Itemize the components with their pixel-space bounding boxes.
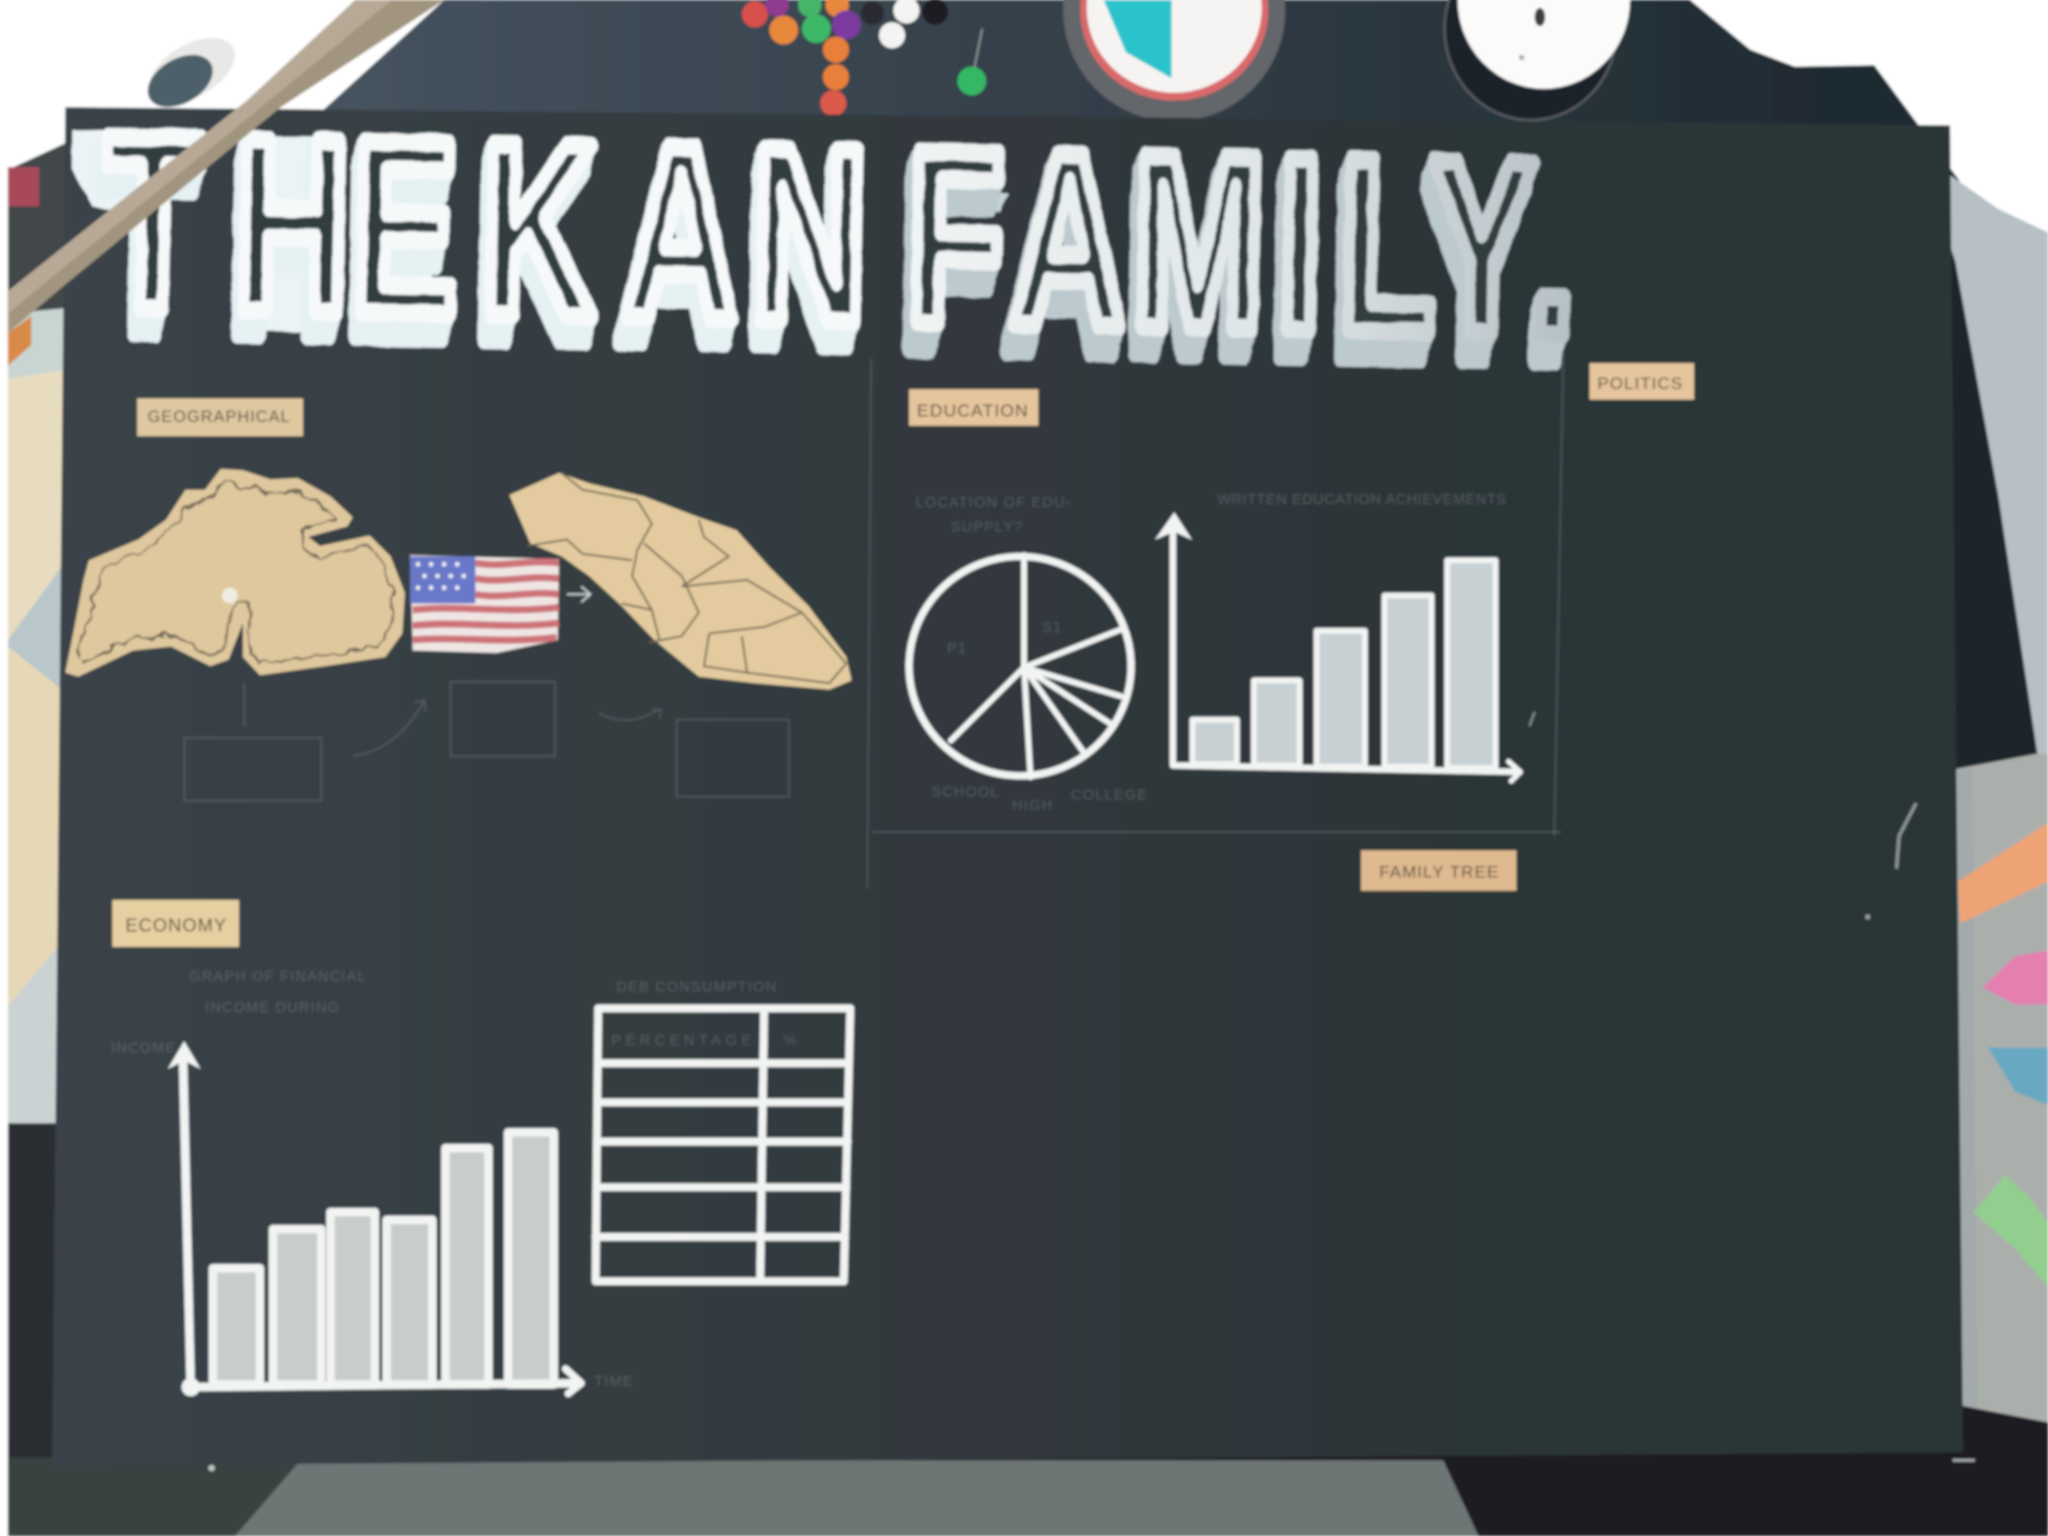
faint pie labels: SCHOOL bbox=[931, 785, 1000, 801]
bar chart: economy bbox=[111, 1041, 634, 1396]
table: PERCENTAGE bbox=[611, 1033, 752, 1049]
bar chart: education bbox=[1159, 515, 1520, 781]
label: geographical bbox=[137, 398, 303, 436]
faint pencil flow diagram bbox=[184, 682, 789, 801]
faint pie labels: COLLEGE bbox=[1071, 787, 1148, 803]
arrow: flag to map bbox=[567, 586, 590, 602]
panel: economy bbox=[111, 900, 850, 1396]
title word: FAMILY: FAMILY. bbox=[904, 98, 1579, 388]
mouse object bbox=[138, 24, 246, 118]
label: education bbox=[909, 389, 1038, 426]
color sticky notes bbox=[1958, 823, 2048, 1287]
faint bar chart heading: WRITTEN EDUCATION ACHIEVEMENTS bbox=[1217, 492, 1507, 508]
faint table heading: DEB CONSUMPTION bbox=[616, 979, 777, 995]
chalk specks and scratches bbox=[208, 55, 1975, 1471]
label: education: EDUCATION bbox=[917, 401, 1029, 421]
faint pencil dividers bbox=[867, 350, 1563, 888]
bar chart: economy: INCOME bbox=[111, 1041, 176, 1057]
label: economy bbox=[112, 900, 239, 947]
label: politics bbox=[1590, 363, 1694, 400]
title: The Kan Family bbox=[72, 84, 1579, 388]
map pins bbox=[742, 0, 986, 116]
candle bbox=[1445, 0, 1630, 120]
label: economy: ECONOMY bbox=[125, 914, 227, 935]
panel: education bbox=[909, 389, 1520, 814]
faint economy chart heading: GRAPH OF FINANCIAL bbox=[189, 969, 367, 985]
label: politics: POLITICS bbox=[1597, 374, 1683, 393]
label: family tree bbox=[1361, 850, 1516, 891]
title letters bbox=[102, 84, 1579, 388]
bar chart: economy: TIME bbox=[594, 1374, 634, 1390]
table bbox=[596, 1008, 850, 1281]
title word: KAN: KAN bbox=[479, 91, 869, 375]
pie chart: S1 bbox=[1042, 620, 1062, 636]
map: right land mass with borders bbox=[509, 473, 852, 690]
label: family tree: FAMILY TREE bbox=[1379, 863, 1499, 882]
title word: THE: THE bbox=[102, 84, 460, 368]
faint pie heading: SUPPLY? bbox=[951, 520, 1024, 536]
faint pie heading: LOCATION OF EDU- bbox=[916, 495, 1072, 511]
label: geographical: GEOGRAPHICAL bbox=[148, 408, 291, 426]
panel: geographical bbox=[65, 398, 852, 801]
coaster bbox=[1063, 0, 1285, 121]
table: % bbox=[784, 1033, 798, 1049]
pie chart: P1 bbox=[947, 641, 967, 657]
faint economy chart heading: INCOME DURING bbox=[205, 1000, 340, 1016]
map: left land mass bbox=[65, 469, 405, 677]
chalk fill behind the letters bbox=[72, 128, 1008, 332]
faint pie labels: HIGH bbox=[1012, 798, 1053, 814]
icon: american flag bbox=[410, 555, 559, 653]
wooden dowel bbox=[8, 0, 444, 366]
pie chart bbox=[909, 555, 1131, 777]
